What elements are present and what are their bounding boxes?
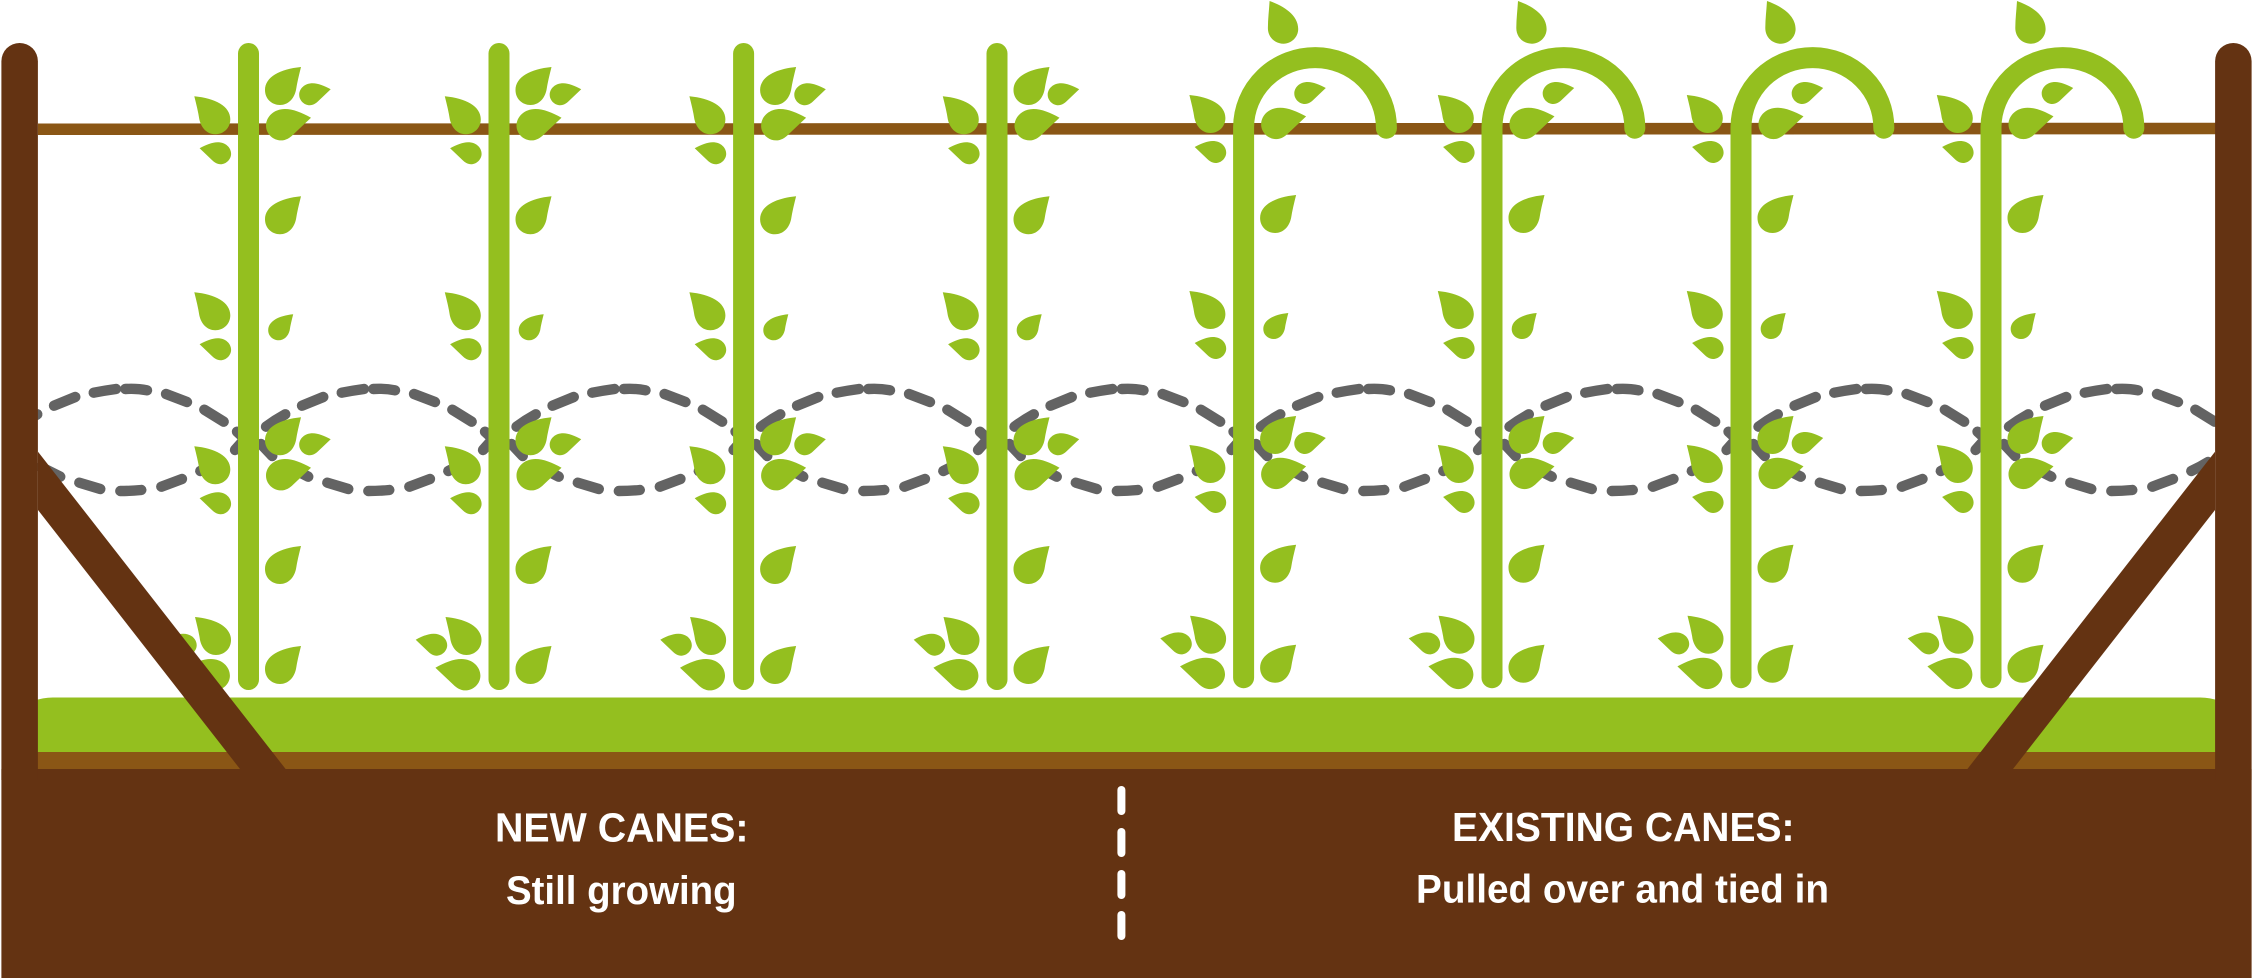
left post [1, 43, 38, 780]
right diagonal brace [1967, 452, 2215, 769]
new cane 4 [914, 54, 1079, 690]
light brown soil strip [20, 752, 2233, 770]
centre dashed divider [1117, 786, 1125, 940]
right post [2215, 43, 2252, 780]
new cane 1 [165, 54, 331, 690]
label: new canes description: Still growing [506, 869, 737, 913]
existing arched cane 1 [1160, 1, 1386, 689]
label: new canes heading: NEW CANES: [495, 804, 748, 850]
existing arched cane 2 [1409, 1, 1635, 689]
dark brown ground panel [1, 769, 2252, 978]
dashed twine woven along the canes [13, 389, 2238, 491]
existing arched cane 3 [1658, 1, 1884, 689]
green grass bed [27, 698, 2226, 768]
label: existing canes heading: EXISTING CANES: [1452, 804, 1794, 850]
new cane 3 [660, 54, 826, 690]
existing arched cane 4 [1908, 1, 2134, 689]
label: existing canes description: Pulled over and tied in [1416, 868, 1829, 912]
left diagonal brace [38, 452, 286, 769]
horizontal trellis wire [38, 123, 2216, 135]
new cane 2 [416, 54, 581, 690]
